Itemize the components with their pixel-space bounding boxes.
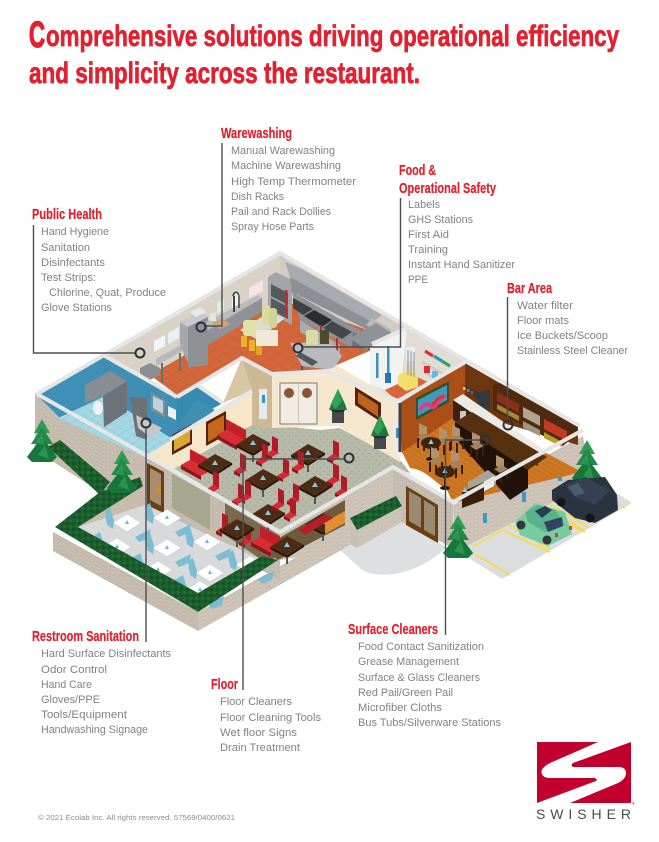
wall signs <box>483 471 562 523</box>
kitchen double door <box>280 383 317 424</box>
text block: food and operational safety: PPE <box>408 274 428 286</box>
potted plants <box>329 389 389 449</box>
leader: warewashing <box>196 143 222 332</box>
text block: restroom sanitation: Handwashing Signage <box>41 724 148 736</box>
text block: public health: Test Strips: <box>41 272 96 284</box>
leader: bar area <box>504 297 512 430</box>
sidewalk <box>338 522 446 575</box>
leader: public health <box>34 225 144 358</box>
bar tables with chairs <box>417 423 463 490</box>
text block: public health: Disinfectants <box>41 257 105 269</box>
text block: warewashing: Warewashing <box>221 125 292 142</box>
kitchen ovens, range and hood <box>268 262 392 355</box>
leader: restroom sanitation <box>142 418 150 642</box>
text block: warewashing <box>221 125 356 233</box>
bar counter and stools <box>450 412 547 500</box>
title: and simplicity across the restaurant. <box>29 57 420 90</box>
hand sanitizer stands <box>259 389 403 455</box>
planter <box>350 496 402 548</box>
text block: public health: Glove Stations <box>41 302 112 314</box>
text block: floor: Wet floor Signs <box>220 727 298 739</box>
text block: restroom sanitation: Restroom Sanitation <box>32 628 139 645</box>
bar wall painting <box>416 381 449 420</box>
text block: surface cleaners: Surface Cleaners <box>348 621 438 638</box>
patio floor <box>78 505 262 595</box>
text block: food and operational safety: Labels <box>408 199 440 211</box>
bar coffee equipment <box>463 385 490 413</box>
restroom <box>37 356 223 458</box>
text block: food and operational safety: GHS Stations <box>408 214 473 226</box>
text block: surface cleaners: Bus Tubs/Silverware Stations <box>358 717 501 729</box>
left brick wall <box>35 393 147 510</box>
right brick wall <box>453 436 592 552</box>
text block: food and operational safety <box>399 162 515 286</box>
wood floor of bar <box>402 410 582 503</box>
text block: floor: Floor <box>211 676 238 693</box>
text block: restroom sanitation: Odor Control <box>41 664 107 676</box>
swisher logo: ® <box>632 801 635 806</box>
title: C <box>29 14 45 55</box>
text block: floor: Floor Cleaning Tools <box>220 712 322 724</box>
text block: floor: Drain Treatment <box>220 742 300 754</box>
text block: surface cleaners <box>348 621 501 729</box>
entrance wall with doors <box>393 467 453 548</box>
text block: public health: Sanitation <box>41 242 90 254</box>
text block: bar area: Floor mats <box>517 315 569 327</box>
swisher logo: SWISHER <box>536 806 631 822</box>
text block: warewashing: Dish Racks <box>231 191 284 203</box>
text block: surface cleaners: Microfiber Cloths <box>358 702 442 714</box>
text block: bar area: Ice Buckets/Scoop <box>517 330 608 342</box>
swisher logo <box>536 742 635 822</box>
text block: restroom sanitation: Hand Care <box>41 679 92 691</box>
patio base wall <box>53 532 198 631</box>
patio back wall <box>72 468 145 528</box>
text block: food and operational safety: First Aid <box>408 229 449 241</box>
text block: bar area: Water filter <box>517 300 573 312</box>
text block: warewashing: Pail and Rack Dollies <box>231 206 331 218</box>
dining tables and booths <box>181 419 348 532</box>
text block: warewashing: High Temp Thermometer <box>231 176 356 188</box>
green car <box>515 503 572 546</box>
text block: restroom sanitation <box>32 628 171 736</box>
front brick wall with cutaway lounge <box>147 455 393 580</box>
text block: warewashing: Spray Hose Parts <box>231 221 314 233</box>
title <box>29 14 619 90</box>
text block: public health <box>32 206 166 314</box>
dining room floor <box>147 420 428 530</box>
text block: warewashing: Machine Warewashing <box>231 160 341 172</box>
dark car <box>552 477 618 523</box>
text block: food and operational safety: Instant Hand Sanitizer <box>408 259 515 271</box>
text block: restroom sanitation: Tools/Equipment <box>41 709 127 721</box>
text block: bar area: Stainless Steel Cleaner <box>517 345 628 357</box>
warewashing station: sinks and dish machine <box>140 292 262 383</box>
dining room walls <box>147 358 400 470</box>
text block: public health: Public Health <box>32 206 102 223</box>
bar back counter <box>453 394 547 466</box>
text block: public health: Hand Hygiene <box>41 226 109 238</box>
text block: surface cleaners: Red Pail/Green Pail <box>358 687 453 699</box>
wall art <box>172 387 381 455</box>
text block: public health: Chlorine, Quat, Produce <box>49 287 166 299</box>
text block: food and operational safety: Food & <box>399 162 436 179</box>
text block: surface cleaners: Food Contact Sanitization <box>358 641 484 653</box>
trees <box>27 419 602 558</box>
kitchen floor <box>150 300 395 395</box>
restaurant isometric illustration <box>27 125 635 822</box>
hedges <box>48 440 278 612</box>
storage room <box>370 328 467 402</box>
back bar shelves with bottles <box>493 383 578 447</box>
kitchen back walls <box>105 254 467 395</box>
leader: food and operational safety <box>294 198 400 352</box>
text block: food and operational safety: Operational Safety <box>399 180 496 197</box>
text block: food and operational safety: Training <box>408 244 448 256</box>
text block: floor <box>211 676 322 754</box>
outer brick wall right of patio <box>198 530 345 631</box>
text block: restroom sanitation: Gloves/PPE <box>41 694 100 706</box>
leader: surface cleaners <box>446 436 490 635</box>
text block: surface cleaners: Surface & Glass Cleaners <box>358 672 480 684</box>
text block: floor: Floor Cleaners <box>220 696 292 708</box>
text block: bar area: Bar Area <box>507 280 552 297</box>
white tops of walls <box>37 253 583 532</box>
text block: bar area <box>507 280 628 357</box>
text block: warewashing: Manual Warewashing <box>231 145 335 157</box>
text block: restroom sanitation: Hard Surface Disinfectants <box>41 648 171 660</box>
copyright: © 2021 Ecolab Inc. All rights reserved. 57569/0400/0621 <box>38 814 235 822</box>
kitchen posters <box>154 280 263 352</box>
leader: floor <box>243 454 354 690</box>
bar room walls <box>400 363 578 453</box>
patio door <box>147 463 164 513</box>
kitchen prep tables <box>240 305 342 378</box>
text block: surface cleaners: Grease Management <box>358 656 459 668</box>
patio tables and chairs <box>95 503 274 609</box>
service station <box>462 470 496 508</box>
parking lot <box>448 472 632 579</box>
